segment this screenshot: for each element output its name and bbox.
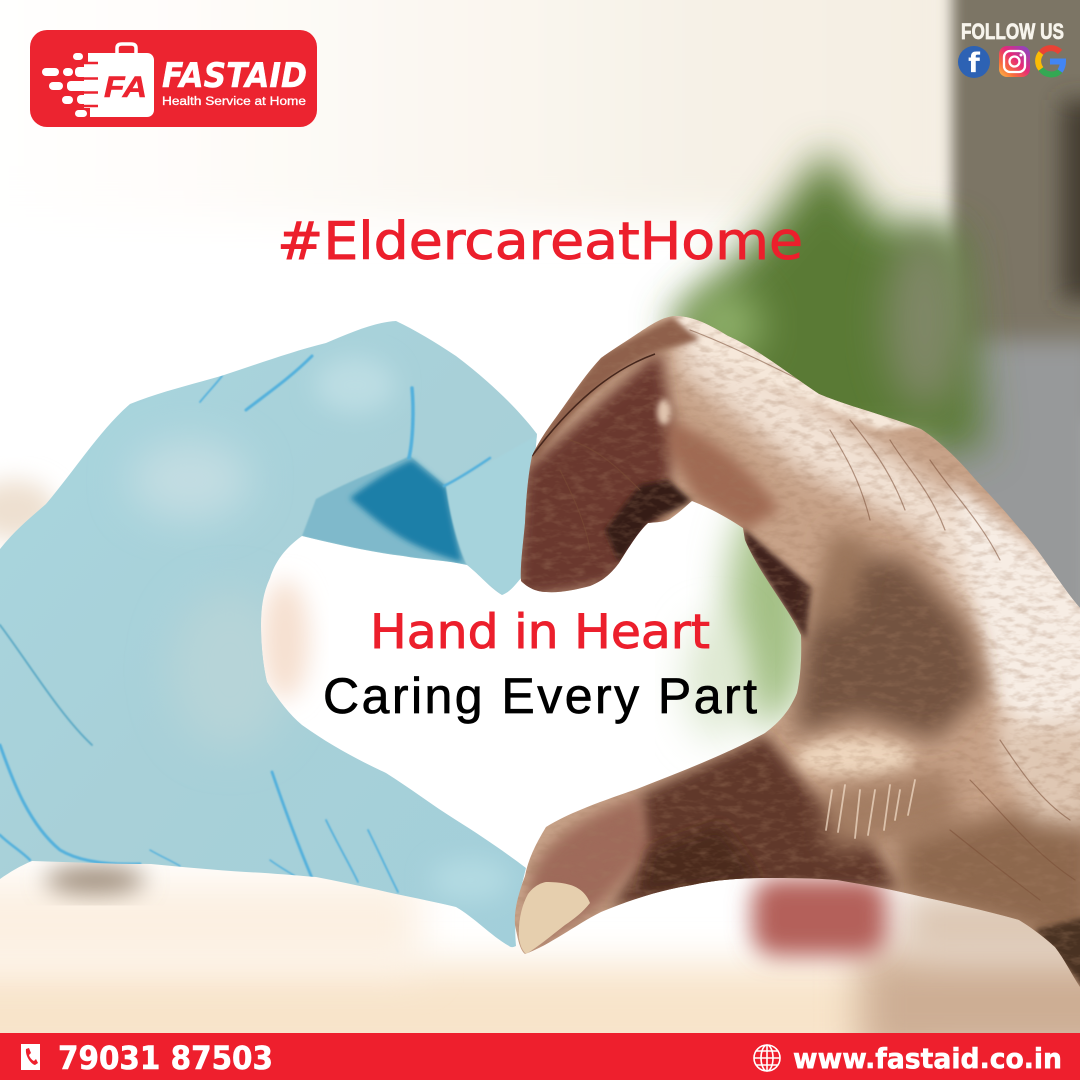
icon: globe bbox=[754, 1045, 780, 1071]
thumb bbox=[610, 735, 900, 910]
phone number: 79031 87503 bbox=[58, 1039, 273, 1077]
icon: instagram bbox=[999, 46, 1030, 77]
shadow under finger bbox=[605, 480, 692, 563]
brand name: FASTAID bbox=[162, 56, 307, 96]
footer bar bbox=[0, 1033, 1080, 1080]
hand: elderly hand bbox=[515, 305, 1080, 1000]
hashtag heading: #EldercareatHome bbox=[277, 212, 803, 272]
tagline line 1: Hand in Heart bbox=[370, 605, 710, 660]
icon: medical bag with FA: FA bbox=[104, 71, 147, 104]
wrinkles bbox=[560, 330, 1075, 900]
thumbnail bbox=[519, 882, 590, 954]
icon: google bbox=[1038, 48, 1063, 74]
icon: facebook: f bbox=[968, 48, 980, 79]
lit back of hand bbox=[680, 305, 1080, 820]
inner finger fold bbox=[302, 456, 467, 565]
tagline: Health Service at Home bbox=[162, 96, 306, 108]
hand: blue glove bbox=[0, 321, 545, 947]
index finger bbox=[515, 350, 675, 600]
website: www.fastaid.co.in bbox=[793, 1042, 1062, 1075]
tagline line 2: Caring Every Part bbox=[323, 668, 757, 724]
logo badge bbox=[30, 30, 317, 127]
icon: phone book bbox=[21, 1044, 40, 1070]
lower right area bbox=[900, 790, 1080, 1000]
main shadow band bbox=[795, 555, 985, 740]
follow us block bbox=[958, 19, 1064, 79]
skin texture bbox=[515, 310, 1080, 990]
bright thumb mound bbox=[797, 738, 913, 778]
icon: medical bag with FA bbox=[42, 44, 154, 117]
